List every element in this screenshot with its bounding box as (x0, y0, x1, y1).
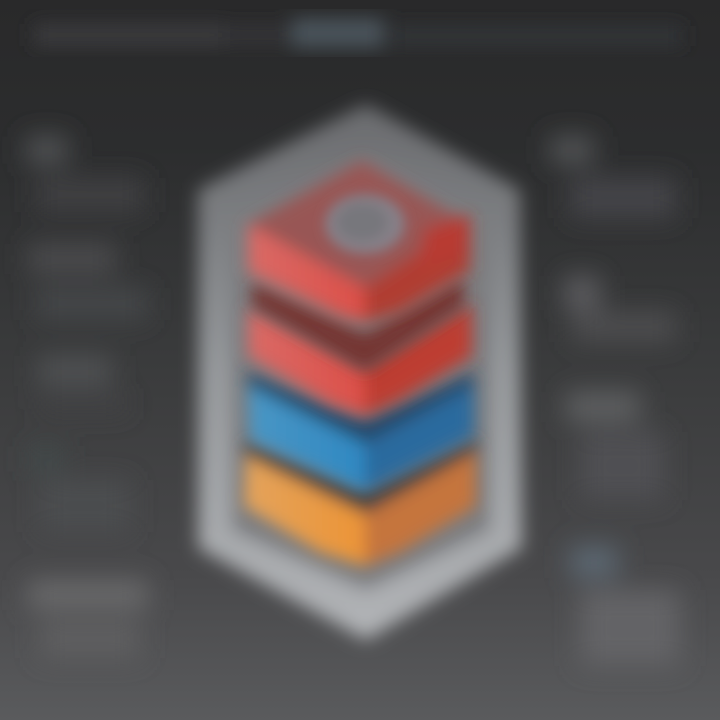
layered stack (244, 160, 476, 566)
hexagon frame (198, 104, 522, 640)
title bar (34, 18, 682, 48)
lower red layer (248, 304, 472, 416)
top face (246, 160, 470, 292)
left block 2 (28, 244, 148, 320)
orange layer (244, 438, 476, 566)
right face (365, 218, 470, 322)
right column text blocks (550, 136, 680, 666)
left face (248, 224, 365, 322)
left block 5 (28, 580, 148, 658)
center ring icon (325, 194, 405, 254)
right block 3 (566, 392, 664, 500)
blue layer (248, 372, 474, 492)
title highlight (292, 18, 384, 48)
left column text blocks (26, 136, 148, 658)
left block 4 (30, 446, 130, 532)
left block 3 (38, 356, 128, 412)
right block 4 (570, 546, 680, 666)
right block 1 (550, 136, 676, 218)
left block 1 (26, 136, 144, 212)
dark gap band (252, 278, 464, 372)
upper red layer (246, 160, 470, 322)
right block 2 (564, 276, 676, 342)
hexagon inner panel (232, 155, 490, 590)
